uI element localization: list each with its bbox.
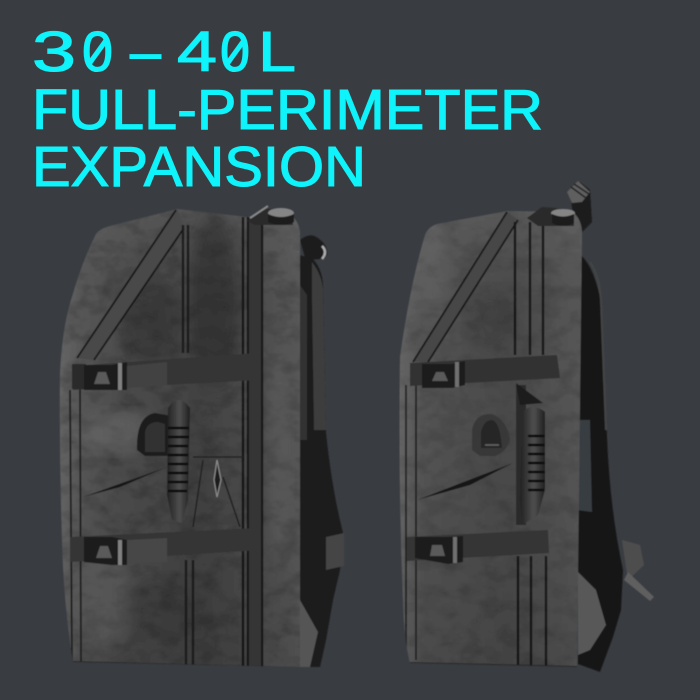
zipper pull of expanded bag — [214, 460, 221, 497]
USB port pocket of compressed bag — [472, 414, 510, 456]
title: FULL-PERIMETER — [32, 78, 543, 142]
backpack expanded 40L — [55, 205, 344, 670]
title: 0 — [82, 20, 113, 84]
title — [32, 20, 543, 199]
title: 0 — [220, 20, 250, 84]
title: 3 — [32, 20, 76, 84]
main body of expanded bag — [55, 205, 305, 670]
top strap and buckle of compressed bag — [410, 355, 560, 388]
lower strap and buckle at back — [622, 540, 654, 601]
USB port pocket of expanded bag — [137, 413, 172, 456]
title: EXPANSION — [32, 135, 366, 199]
backpack compressed 30L — [398, 181, 654, 672]
grab handle behind top of expanded bag — [300, 235, 327, 259]
bottom strap and buckle of compressed bag — [407, 530, 549, 564]
side carry handle of expanded bag — [167, 400, 190, 523]
side carry handle of compressed bag — [516, 383, 545, 525]
bottom strap and buckle of expanded bag — [70, 528, 261, 565]
carry handle on top of compressed bag — [567, 181, 592, 232]
top hardware of expanded bag — [247, 206, 294, 225]
back strap of compressed bag — [577, 253, 623, 672]
top strap and buckle of expanded bag — [72, 353, 258, 390]
top hardware of compressed bag — [527, 207, 575, 226]
main body of compressed bag — [398, 205, 588, 670]
title: – — [130, 20, 161, 84]
back panel of expanded bag — [298, 255, 344, 667]
title: 4 — [177, 20, 217, 84]
title: L — [258, 20, 296, 84]
